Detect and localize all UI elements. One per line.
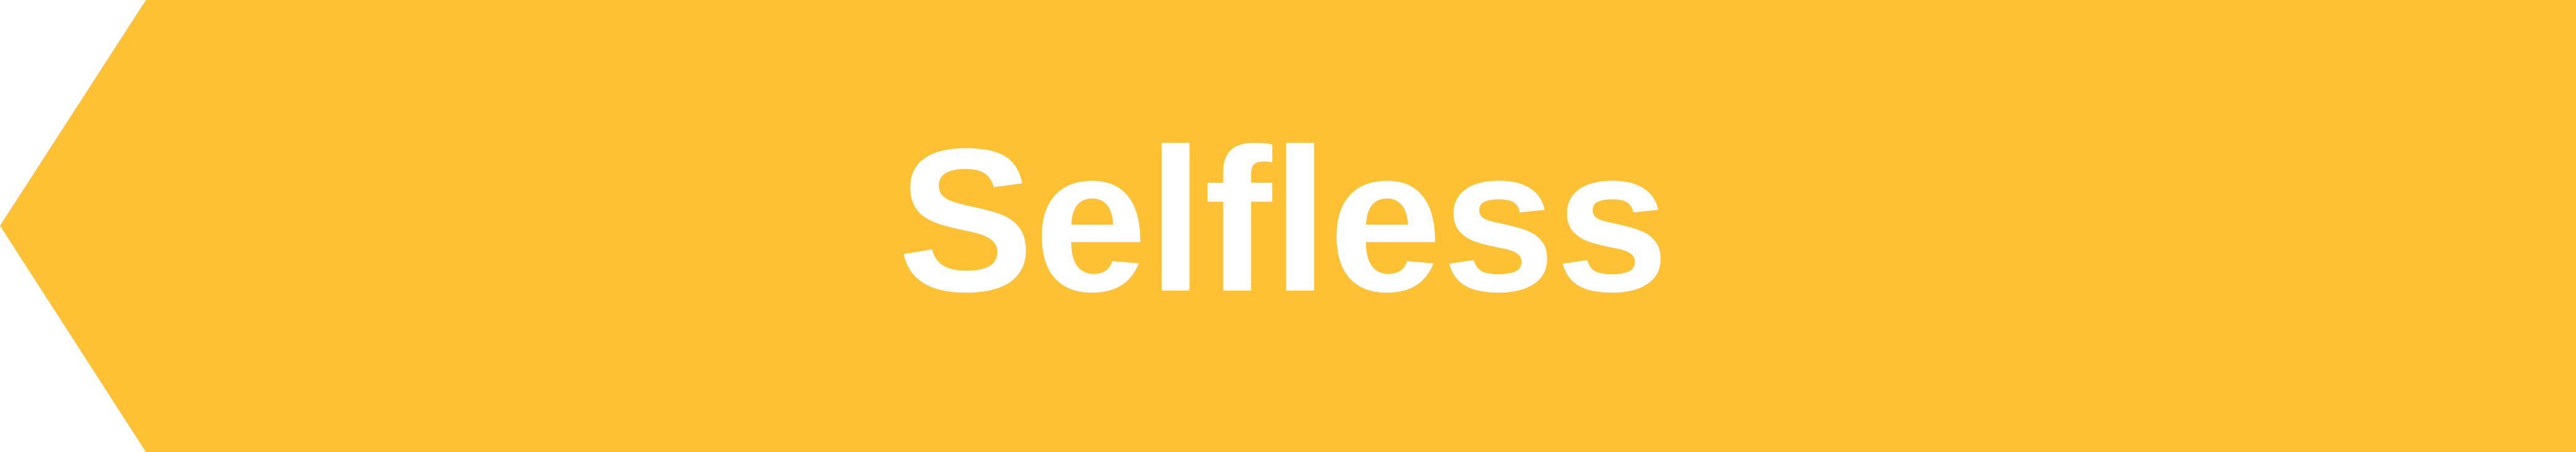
title: Selfless: Selfless (898, 106, 1669, 334)
